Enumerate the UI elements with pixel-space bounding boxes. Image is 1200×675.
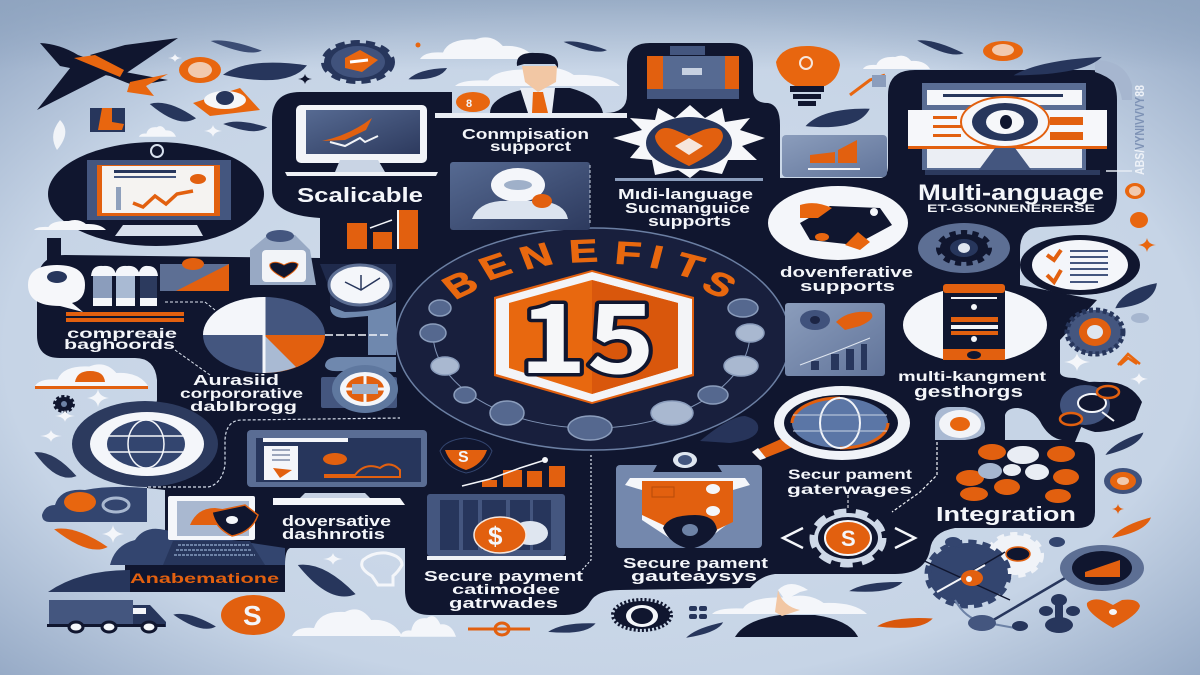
secure card [616, 448, 762, 549]
light notches around the integration panel [935, 407, 1062, 440]
clock [320, 264, 396, 372]
bottom left icons [48, 522, 402, 636]
text: multi-language e-commerce: Multi-anguage [918, 180, 1104, 205]
central benefits circle [396, 228, 790, 450]
text: secure payment gateways centre [623, 555, 768, 585]
integration icon cluster [956, 444, 1079, 503]
text: compensation support: Conmpisation [462, 126, 589, 143]
person on desk [420, 37, 627, 118]
connector to vertical label [1106, 170, 1132, 172]
globe circle [72, 401, 218, 487]
scalable monitor [285, 105, 438, 176]
dotted connector [582, 455, 591, 570]
text: compensation support [462, 126, 589, 154]
text: diverse supports: dovenferative [780, 264, 913, 281]
gray chart panel [782, 135, 887, 177]
shield badge with number 15: 15 [519, 262, 655, 401]
gear with S: S [841, 526, 856, 551]
orange rule lines [66, 312, 184, 322]
gear with dollar icon [324, 43, 392, 81]
dashed connector [165, 302, 215, 375]
dollar panel [427, 494, 566, 560]
bottom right icons [849, 431, 1154, 629]
gear with S [783, 495, 915, 563]
puzzle circle [768, 186, 908, 260]
text: secure payment gateways right: Secur pament [788, 466, 912, 482]
text: integration: Integration [936, 504, 1076, 526]
icon nodes on ring [420, 299, 764, 440]
left side icons [32, 364, 148, 485]
text: secure payment left: gatrwades [449, 595, 558, 612]
text: secure payment gateways right [787, 466, 912, 497]
text: secure payment gateways centre: gauteaysys [631, 568, 757, 585]
text: diverse dashboards [282, 513, 391, 543]
text: secure payment gateways centre: Secure pament [623, 555, 768, 572]
checklist circle [1020, 235, 1140, 295]
text: comprehensive dashboards: compreaie [67, 325, 177, 341]
dollar pin and growth bars: S [458, 449, 469, 466]
left oval monitor [48, 142, 264, 246]
dollar panel: $ [488, 521, 503, 551]
text: diverse dashboards: dashnrotis [282, 526, 385, 543]
gray mini chart panel with pin [785, 303, 885, 376]
text: corporative dashboard: dablbrogg [190, 398, 297, 414]
laptop with shield [110, 496, 285, 565]
text: multi-language support: supports [648, 213, 731, 230]
multi-language monitor [908, 83, 1107, 175]
cloud with badge icon [42, 487, 147, 522]
text: multi-language e-commerce [918, 180, 1104, 215]
text: diverse dashboards: doversative [282, 513, 391, 530]
orange label: Anabematione [130, 570, 279, 586]
chart ring [1060, 545, 1144, 591]
text: multi-language support: Sucmanguice [625, 200, 750, 217]
dashboard monitor [247, 430, 427, 505]
heading: BENEFITS arched: BENEFITS [435, 234, 744, 306]
pie chart [203, 297, 325, 373]
text: secure payment gateways right: gaterwages [787, 481, 912, 497]
text: diverse supports [780, 264, 913, 295]
truck icon [47, 600, 166, 632]
column bars [91, 266, 158, 306]
dollar pin and growth bars [440, 438, 565, 487]
person on desk: 8 [466, 98, 472, 110]
text: corporative dashboard: Aurasiid [193, 372, 279, 389]
top-left small icons [53, 36, 312, 150]
top centre leaves and dot [407, 38, 607, 82]
dotted rounded frame [148, 418, 400, 487]
text: corporative dashboard: corpororative [180, 385, 303, 401]
tag with heart [250, 230, 316, 285]
top right small icons [804, 36, 1132, 131]
person bottom right [712, 584, 867, 637]
user card [450, 162, 590, 230]
text: multi-language support [618, 186, 753, 230]
text: secure payment left: catimodee [452, 581, 560, 597]
speech bubble [28, 265, 85, 312]
text: diverse supports: supports [800, 278, 895, 295]
text: comprehensive dashboards [64, 325, 177, 352]
text: multi management [898, 368, 1046, 401]
left cloud [34, 220, 106, 230]
plane icon [37, 38, 178, 110]
text: multi-language support: Mıdi-language [618, 186, 753, 203]
globe badge [321, 365, 398, 413]
small badge above integration [892, 410, 981, 512]
lightbulb icon [776, 46, 886, 106]
text: secure payment left: Secure payment [424, 568, 583, 585]
starburst heart badge [613, 105, 765, 181]
dark connected layout backdrop [37, 43, 1117, 615]
text: secure payment left [424, 568, 583, 612]
text: multi management: gesthorgs [914, 382, 1023, 401]
dollar coin icon: S [243, 600, 262, 631]
scalable bar chart [347, 210, 418, 249]
text: multi management: multi-kangment [898, 368, 1046, 384]
phone circle [903, 284, 1047, 363]
text: Scalable: Scalicable [297, 185, 423, 207]
text: corporative dashboard [180, 372, 303, 414]
dollar coin icon [172, 595, 285, 635]
text: multi-language e-commerce: ET-GSONNENERERSE [927, 203, 1095, 215]
bottom centre icons [400, 601, 725, 640]
top centre product panel [647, 46, 739, 99]
magnifier globe [752, 386, 910, 460]
shield badge with number 15 [494, 262, 694, 404]
dark gear blob with magnifier [1060, 382, 1142, 432]
folder icon [160, 258, 229, 291]
text: comprehensive dashboards: baghoords [64, 336, 175, 352]
text: compensation support: supporct [490, 138, 571, 154]
gear circle [918, 223, 1010, 273]
right side small icons [1064, 183, 1161, 385]
gears and network bottom right [920, 535, 1080, 633]
vertical garbled label: ABS/VYNIVVVY88 [1132, 85, 1147, 175]
